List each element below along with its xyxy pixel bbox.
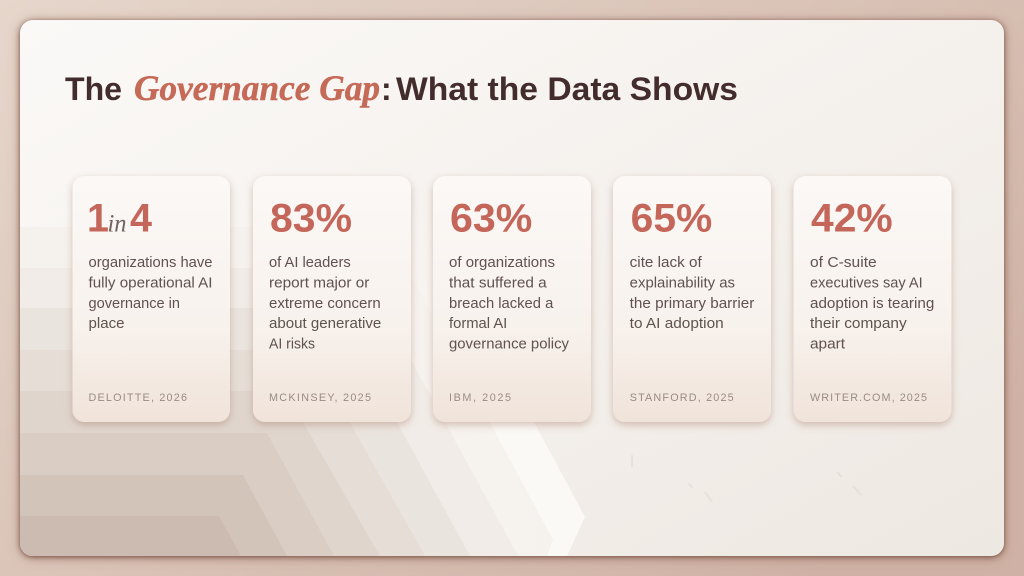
description: governance policy: [449, 336, 570, 352]
stepped chevron background pattern: [20, 268, 861, 556]
description: fully operational AI: [88, 276, 212, 292]
description: [810, 255, 934, 352]
description: that suffered a: [449, 276, 547, 292]
card: 83%: [253, 176, 411, 422]
description: explainability as: [630, 276, 735, 292]
stat: 65%: 65%: [631, 196, 712, 240]
stat: 1 in 4: 4: [130, 196, 152, 240]
card: 65%: [613, 176, 771, 422]
title: Governance Gap: [134, 68, 380, 108]
description: breach lacked a: [449, 296, 553, 312]
description: [449, 255, 570, 352]
stat: 1 in 4: 1: [87, 196, 109, 240]
description: report major or: [269, 276, 370, 292]
stat: 42%: 42%: [811, 196, 893, 240]
source: STANFORD, 2025: [630, 392, 734, 404]
source: IBM, 2025: [449, 392, 511, 404]
description: the primary barrier: [630, 296, 755, 312]
description: formal AI: [449, 316, 507, 332]
description: AI risks: [269, 336, 315, 352]
card: 63%: [433, 176, 591, 422]
description: adoption is tearing: [810, 296, 934, 312]
stat: 1 in 4: in: [108, 210, 126, 238]
description: apart: [810, 336, 845, 352]
title: What the Data Shows: [396, 71, 738, 107]
card: 1 in 4: [72, 176, 230, 422]
description: cite lack of: [630, 255, 703, 271]
description: executives say AI: [810, 276, 923, 292]
card: 42%: [794, 176, 952, 422]
title: The: [65, 71, 122, 107]
stat: 83%: 83%: [270, 196, 352, 240]
description: about generative: [269, 316, 381, 332]
description: organizations have: [88, 255, 212, 271]
stat: 1 in 4: [87, 196, 152, 240]
description: of organizations: [449, 255, 555, 271]
description: place: [88, 316, 124, 332]
description: of AI leaders: [269, 255, 351, 271]
title: :: [381, 71, 392, 107]
description: [269, 255, 381, 352]
source: DELOITTE, 2026: [88, 392, 187, 404]
description: extreme concern: [269, 296, 381, 312]
stat: 63%: 63%: [450, 196, 532, 240]
description: of C-suite: [810, 255, 877, 271]
description: governance in: [88, 296, 180, 312]
source: MCKINSEY, 2025: [269, 392, 371, 404]
description: [88, 255, 212, 332]
title: [65, 68, 738, 108]
description: their company: [810, 316, 908, 332]
source: WRITER.COM, 2025: [810, 392, 927, 404]
description: to AI adoption: [630, 316, 724, 332]
description: [630, 255, 755, 332]
